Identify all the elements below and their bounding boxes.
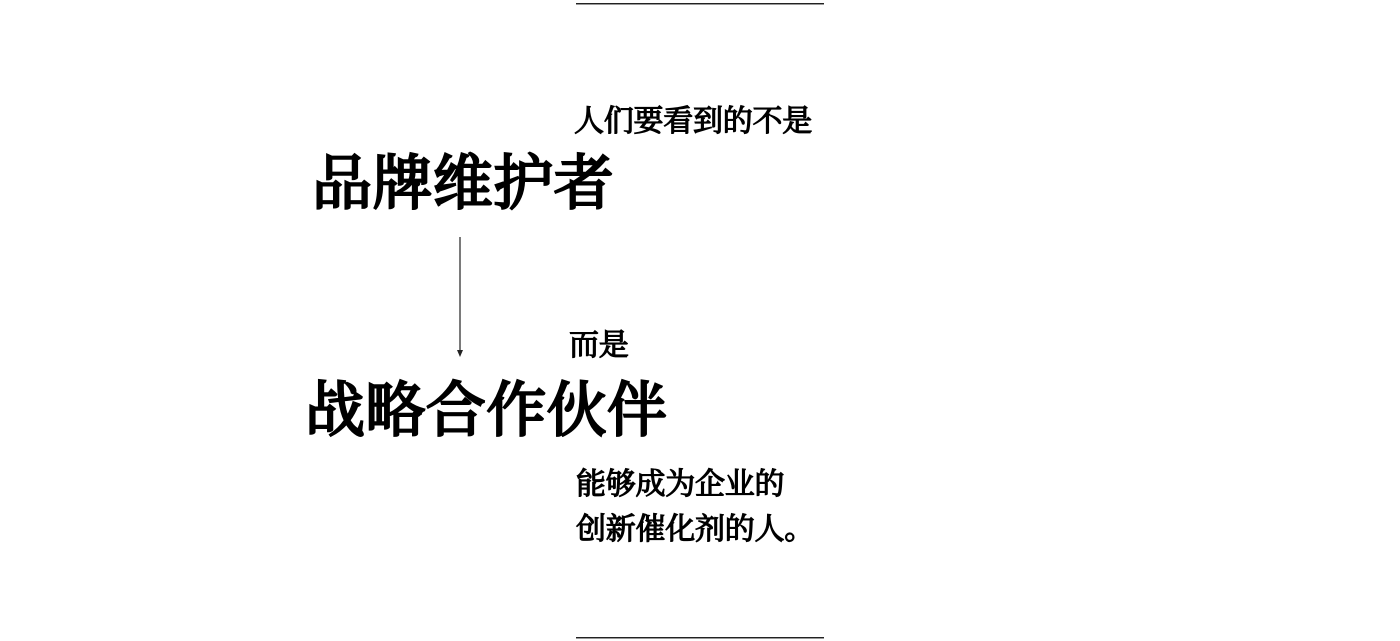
arrow: down from brand guardian to strategic partner [457,237,463,357]
bottom rule [576,637,824,638]
text: closing statement [576,467,814,546]
text: lead-in line: 人们要看到的不是 [574,105,812,138]
text: closing statement: 能够成为企业的 [576,468,784,501]
text: closing statement: 创新催化剂的人。 [576,513,814,546]
top rule [576,3,824,4]
text: but rather: 而是 [569,329,628,362]
heading: strategic partner: 战略合作伙伴 [305,378,667,444]
heading: brand guardian: 品牌维护者 [312,151,614,217]
